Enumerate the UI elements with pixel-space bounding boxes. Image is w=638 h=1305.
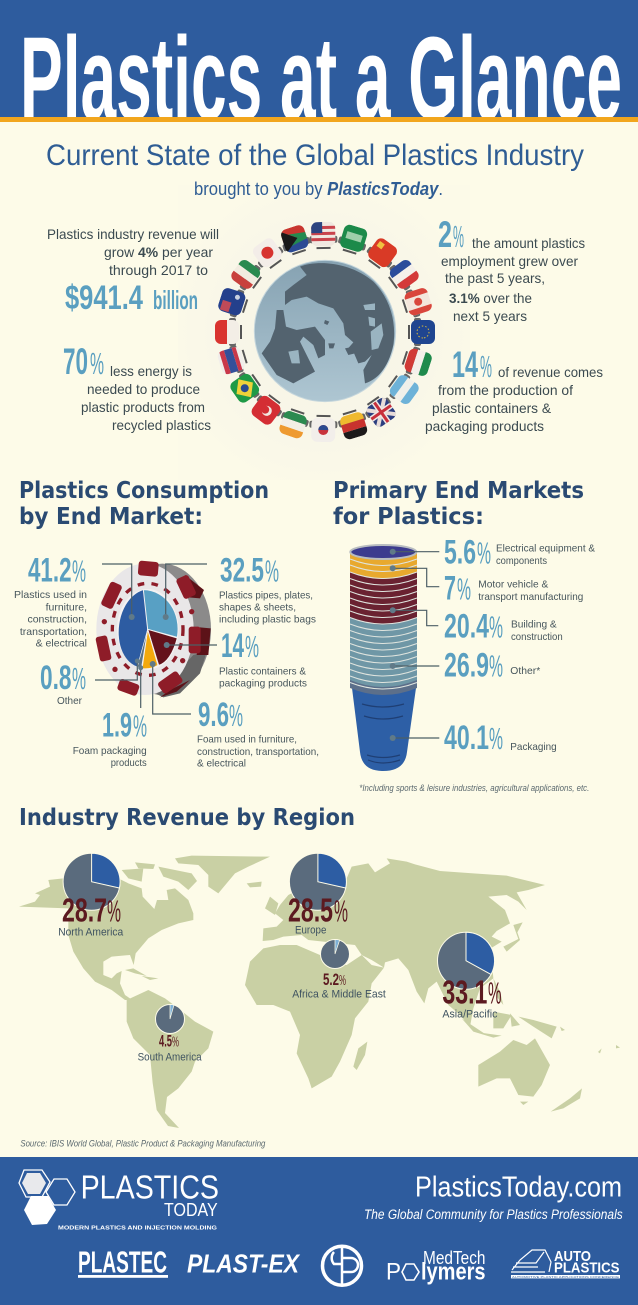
infographic: % xyxy=(488,975,502,1010)
United Kingdom xyxy=(265,897,278,915)
region label: Europe: Europe xyxy=(295,925,326,937)
chair: Turkey xyxy=(252,394,282,425)
Americas, Greenland and Iceland xyxy=(19,856,270,1128)
logo: MedTech Polymers: MedTech xyxy=(423,1248,486,1268)
label: 1.9%: 1.9 xyxy=(102,707,132,745)
label: 41.2%: 41.2 xyxy=(28,552,72,590)
logo: Plastics Today wordmark xyxy=(58,1168,219,1231)
chair: Brazil xyxy=(230,372,261,403)
pie: Asia Pacific xyxy=(438,932,495,989)
panel: globe backdrop xyxy=(178,185,470,480)
South America xyxy=(127,990,213,1128)
stat: revenue growth: $941.4 xyxy=(65,279,143,317)
label: 5.6%: components xyxy=(496,555,547,567)
label: 1.9%: % xyxy=(133,709,147,744)
label: 14%: % xyxy=(245,629,259,664)
region label: Europe: % xyxy=(334,894,348,929)
label: 7%: Motor vehicle & xyxy=(478,579,548,591)
cups: building xyxy=(350,572,417,624)
chart: poker-chip pie xyxy=(95,560,211,697)
chair: Argentina xyxy=(388,374,419,404)
slice: 14% xyxy=(148,629,177,665)
stat: 14% of revenue: from the production of xyxy=(438,382,573,398)
label: 41.2%: furniture, xyxy=(46,602,87,614)
stat: revenue growth: Plastics industry revenue will xyxy=(47,226,219,242)
slice: 32.5% xyxy=(143,590,178,637)
chair: European Union xyxy=(409,318,435,346)
leader lines and dots: cups xyxy=(390,549,439,741)
label: 32.5% xyxy=(219,552,316,626)
label: 9.6%: 9.6 xyxy=(198,696,229,734)
label: 41.2%: construction, xyxy=(27,614,87,626)
stat: 14% of revenue: 14 xyxy=(452,344,478,385)
chair: Saudi Arabia xyxy=(338,224,368,255)
cup rim: electrical xyxy=(350,545,416,559)
logo: Plastics Today wordmark: PLASTICS xyxy=(81,1168,219,1205)
Iceland xyxy=(247,882,262,887)
stat: 14% of revenue: plastic containers & xyxy=(432,400,552,416)
label: 14%: Plastic containers & xyxy=(219,666,306,678)
label: 7%: % xyxy=(457,571,471,606)
logo: MedTech Polymers: lymers xyxy=(421,1258,486,1285)
label: 7%: 7 xyxy=(444,569,456,607)
heading: end markets xyxy=(333,478,584,530)
label: 20.4%: % xyxy=(489,610,503,645)
label: 9.6%: % xyxy=(229,698,243,733)
stat: 70% less energy: needed to produce xyxy=(87,381,200,397)
label: 41.2% xyxy=(14,552,87,650)
logo: Plastics Today wordmark: MODERN PLASTICS AND INJECTION MOLDING xyxy=(58,1225,217,1231)
chair: Canada xyxy=(402,288,432,318)
chair: Indonesia xyxy=(215,318,241,346)
stat: 2% employment growth: 2 xyxy=(438,214,452,255)
chair: Iran xyxy=(402,346,432,376)
chair: Australia xyxy=(218,288,248,318)
label: 0.8%: % xyxy=(72,661,86,696)
cups: motor vehicle xyxy=(350,552,417,579)
region label: Africa and Middle East xyxy=(292,970,386,1001)
globe xyxy=(254,260,396,402)
label: 1.9%: Foam packaging xyxy=(73,745,147,757)
label: 7%: transport manufacturing xyxy=(478,591,583,603)
footnote: *Including sports & leisure industries, agricultural applications, etc. xyxy=(359,783,589,793)
Greenland xyxy=(175,856,270,893)
stat: revenue growth: billion xyxy=(153,285,198,315)
globe with flag chairs xyxy=(215,222,435,442)
label: 5.6%: 5.6 xyxy=(444,533,476,571)
stat: 70% less energy: less energy is xyxy=(110,363,192,379)
heading: end markets: Primary End Markets xyxy=(333,478,584,504)
logo: Auto Plastics xyxy=(511,1248,620,1279)
region label: North America: 28.7 xyxy=(62,892,107,929)
heading: consumption: by End Market: xyxy=(19,504,203,530)
label: 32.5%: shapes & sheets, xyxy=(219,602,296,614)
credit line: brought to you by PlasticsToday. xyxy=(194,179,443,199)
world map xyxy=(19,856,620,1128)
North America xyxy=(19,867,193,1000)
label: 32.5%: 32.5 xyxy=(220,552,264,590)
label: 7% xyxy=(444,569,583,607)
label: 5.6%: Electrical equipment & xyxy=(496,543,595,555)
header banner xyxy=(0,0,638,145)
label: 0.8%: 0.8 xyxy=(40,659,72,697)
label: 0.8%: Other xyxy=(57,695,82,707)
chair: Germany xyxy=(338,409,368,440)
slice: 41.2% xyxy=(119,590,148,667)
logo: Auto Plastics: AUTOMOTIVE PLASTIC APPLICATIONS CONFERENCE xyxy=(512,1275,619,1279)
region label: South America: % xyxy=(172,1034,179,1051)
stat: 70% less energy: recycled plastics xyxy=(112,417,211,433)
stat: revenue growth: grow 4% per year xyxy=(104,244,213,260)
label: 20.4%: 20.4 xyxy=(444,608,489,646)
label: 20.4% xyxy=(444,608,563,646)
region label: Asia Pacific: 33.1 xyxy=(442,973,487,1010)
stat: 2% employment growth: the amount plastics xyxy=(472,235,585,251)
pie: Europe xyxy=(289,853,346,910)
stat: 70% less energy: 70 xyxy=(63,341,88,382)
logo: hexagons xyxy=(19,1170,75,1225)
stat: 14% of revenue xyxy=(425,344,603,434)
logo: Plastics Today wordmark: TODAY xyxy=(164,1200,218,1220)
stat: revenue growth: through 2017 to xyxy=(109,262,208,278)
Japan xyxy=(503,922,523,952)
region label: Africa and Middle East: % xyxy=(339,972,346,989)
heading: revenue: Industry Revenue by Region xyxy=(19,805,355,831)
Africa and Arabia xyxy=(245,945,384,1088)
stat: 2% employment growth: employment grew over xyxy=(441,253,578,269)
label: 26.9%: Other* xyxy=(510,665,540,677)
label: 26.9% xyxy=(444,647,540,685)
label: 41.2%: % xyxy=(72,554,86,589)
stat: 14% of revenue: % xyxy=(480,349,492,384)
chart: stack of cups xyxy=(350,545,417,771)
label: 9.6%: Foam used in furniture, xyxy=(197,734,297,746)
region label: Europe: 28.5 xyxy=(288,892,333,929)
region label: Asia Pacific: Asia/Pacific xyxy=(442,1009,498,1021)
region label: South America: South America xyxy=(138,1052,202,1064)
region label: South America: 4.5 xyxy=(159,1032,172,1051)
logo: MedTech Polymers: P xyxy=(386,1258,401,1285)
chair: China xyxy=(366,238,397,269)
label: 41.2%: Plastics used in xyxy=(14,589,87,601)
heading: end markets: for Plastics: xyxy=(333,504,484,530)
Caribbean xyxy=(125,968,158,980)
region label: Africa and Middle East: 5.2 xyxy=(323,970,339,989)
label: 14%: packaging products xyxy=(219,678,307,690)
region label: North America: % xyxy=(107,894,121,929)
stat: 14% of revenue: packaging products xyxy=(425,418,544,434)
label: 9.6%: & electrical xyxy=(197,758,246,770)
chair: United Kingdom xyxy=(365,396,396,427)
chair: USA xyxy=(309,222,338,248)
label: 20.4%: construction xyxy=(511,631,563,643)
Australia xyxy=(478,1038,550,1097)
stat: 70% less energy: plastic products from xyxy=(81,399,205,415)
label: 14%: 14 xyxy=(221,627,244,665)
logo: Auto Plastics: AUTO xyxy=(554,1248,591,1265)
footer band xyxy=(0,1157,638,1305)
heading: consumption xyxy=(19,478,269,530)
region label: Africa and Middle East: Africa & Middle East xyxy=(292,989,386,1001)
Indonesia xyxy=(462,1012,620,1053)
label: 32.5%: Plastics pipes, plates, xyxy=(219,590,313,602)
label: 9.6% xyxy=(197,696,319,770)
stat: 70% less energy xyxy=(63,341,211,433)
chair: Japan xyxy=(253,238,284,269)
stat: 14% of revenue: of revenue comes xyxy=(498,364,603,380)
cups: other xyxy=(350,676,417,695)
heading: consumption: Plastics Consumption xyxy=(19,478,269,504)
label: 1.9%: products xyxy=(111,757,147,769)
subtitle: Current State of the Global Plastics Industry xyxy=(46,139,584,172)
label: 40.1%: % xyxy=(489,721,503,756)
pie: Africa and Middle East xyxy=(320,939,350,968)
label: 40.1% xyxy=(444,719,557,757)
label: 41.2%: & electrical xyxy=(36,638,87,650)
chair: South Korea xyxy=(309,416,338,442)
chair: Thailand xyxy=(218,346,248,374)
label: 20.4%: Building & xyxy=(511,619,557,631)
logo: PLASTEC xyxy=(78,1245,168,1280)
chair: France xyxy=(388,260,419,290)
label: 32.5%: including plastic bags xyxy=(219,614,316,626)
Tasmania and New Zealand xyxy=(520,1088,582,1112)
logo: PLAST-EX: PLAST-EX xyxy=(187,1249,300,1279)
logo: PLASTEC: PLASTEC xyxy=(78,1245,167,1280)
logo: circle emblem xyxy=(322,1246,362,1285)
label: 40.1%: 40.1 xyxy=(444,719,489,757)
slice: 1.9% xyxy=(137,629,148,669)
label: 5.6%: % xyxy=(477,535,491,570)
Eastern hemisphere xyxy=(245,858,620,1112)
pie: North America xyxy=(63,853,120,910)
stat: 2% employment growth: % xyxy=(453,219,464,254)
stat: 2% employment growth: the past 5 years, xyxy=(445,270,545,286)
slice: 9.6% xyxy=(142,629,158,669)
pie: South America xyxy=(156,1004,184,1034)
label: 14% xyxy=(219,627,307,690)
label: 26.9%: % xyxy=(489,649,503,684)
logo: MedTech Polymers xyxy=(386,1248,486,1285)
cup: packaging xyxy=(352,688,416,771)
stat: 2% employment growth: next 5 years xyxy=(453,308,527,324)
label: 41.2%: transportation, xyxy=(20,626,87,638)
stat: revenue growth xyxy=(47,226,219,317)
label: 5.6% xyxy=(444,533,595,571)
Madagascar xyxy=(353,1042,367,1070)
region label: North America: North America xyxy=(58,926,124,938)
leader lines and dots: pie xyxy=(95,564,217,714)
label: 32.5%: % xyxy=(265,554,279,589)
Arctic islands xyxy=(122,862,197,890)
label: 1.9% xyxy=(73,707,147,769)
label: 40.1%: Packaging xyxy=(510,741,557,753)
region label: South America xyxy=(138,1032,202,1064)
chair: India xyxy=(280,408,309,438)
Philippines xyxy=(493,978,503,1005)
stat: 2% employment growth: 3.1% over the xyxy=(449,290,532,306)
stat: 70% less energy: % xyxy=(90,346,104,381)
label: 9.6%: construction, transportation, xyxy=(197,746,319,758)
label: 26.9%: 26.9 xyxy=(444,647,489,685)
source note: Source: IBIS World Global, Plastic Product & Packaging Manufacturing xyxy=(20,1139,265,1149)
chair: South Africa xyxy=(281,225,310,256)
chair: Mexico xyxy=(231,260,262,290)
logo: Auto Plastics: PLASTICS xyxy=(554,1260,620,1277)
stat: 2% employment growth xyxy=(438,214,585,324)
Eurasia xyxy=(263,858,545,1027)
